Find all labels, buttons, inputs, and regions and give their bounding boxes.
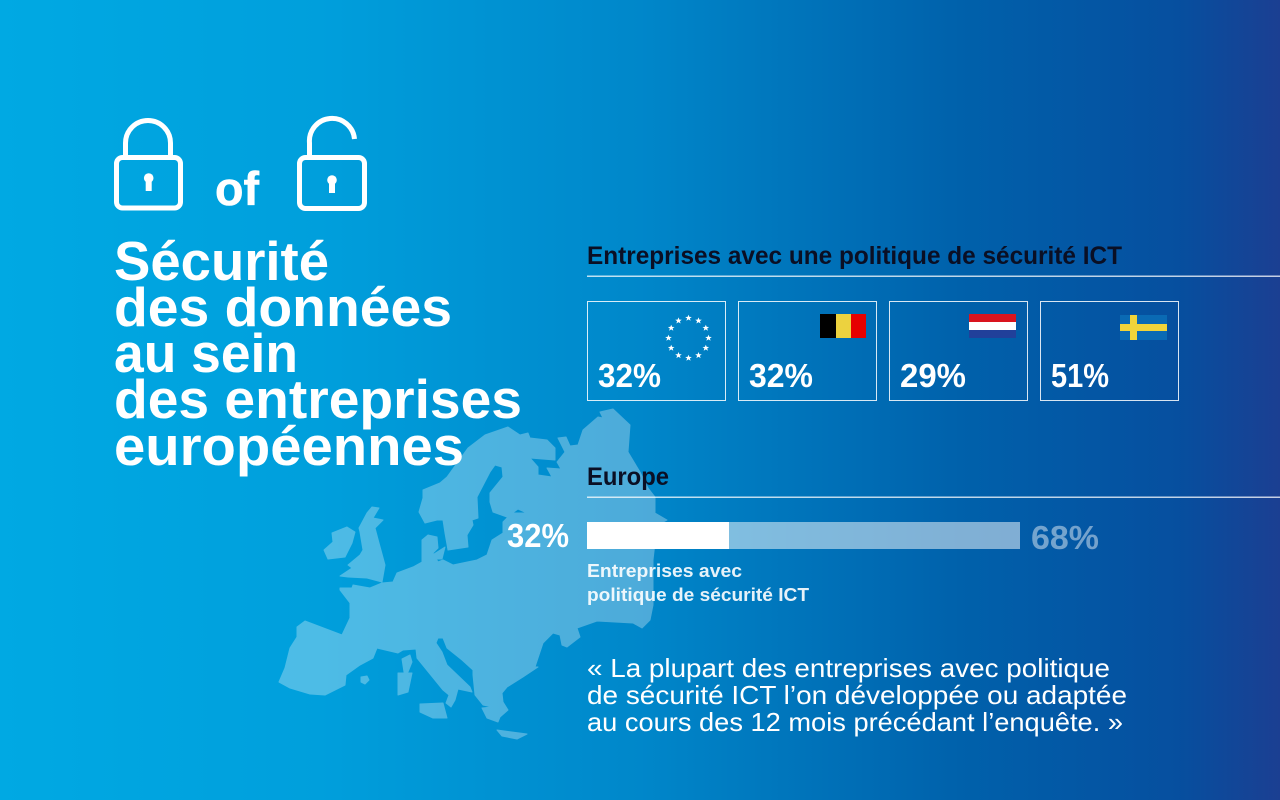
quote [587,653,1127,737]
title: européennes [114,415,464,477]
panel: Belgium 32%: 32% [749,357,813,394]
icon: Belgian flag [820,314,866,338]
icon: EU stars [665,315,712,361]
icon: closed padlock [116,120,180,208]
bar chart: 32% vs 68%: 32% [507,517,569,554]
panel: EU 32% [588,302,726,400]
panel: Sweden 51% [1040,302,1178,400]
panel: Belgium 32% [738,302,876,400]
icon: Swedish flag [1120,315,1167,340]
icon: open padlock [300,118,364,208]
bar chart: 32% vs 68%: 68% [1031,519,1099,556]
quote: au cours des 12 mois précédant l’enquête. » [587,707,1123,737]
quote: « La plupart des entreprises avec politique [587,653,1110,683]
bar label: Entreprises avec [587,560,742,581]
panel: Netherlands 29%: 29% [900,357,966,394]
quote: de sécurité ICT l’on développée ou adaptée [587,680,1127,710]
bar label: politique de sécurité ICT [587,584,810,605]
heading: ICT security policy: Entreprises avec une politique de sécurité ICT [587,242,1122,270]
bar chart: 32% vs 68% [507,517,1099,556]
panel: Netherlands 29% [890,302,1028,400]
title [114,230,522,477]
panel: Sweden 51%: 51% [1051,357,1109,394]
title: Sécurité [114,230,329,292]
panel: EU 32%: 32% [598,357,661,394]
icon: Dutch flag [969,314,1016,338]
text: of: of [215,162,259,215]
title: des entreprises [114,368,522,430]
bar label [587,560,810,605]
title: des données [114,276,452,338]
title: au sein [114,322,298,384]
map of Europe [279,409,667,739]
heading: Europe: Europe [587,463,669,491]
